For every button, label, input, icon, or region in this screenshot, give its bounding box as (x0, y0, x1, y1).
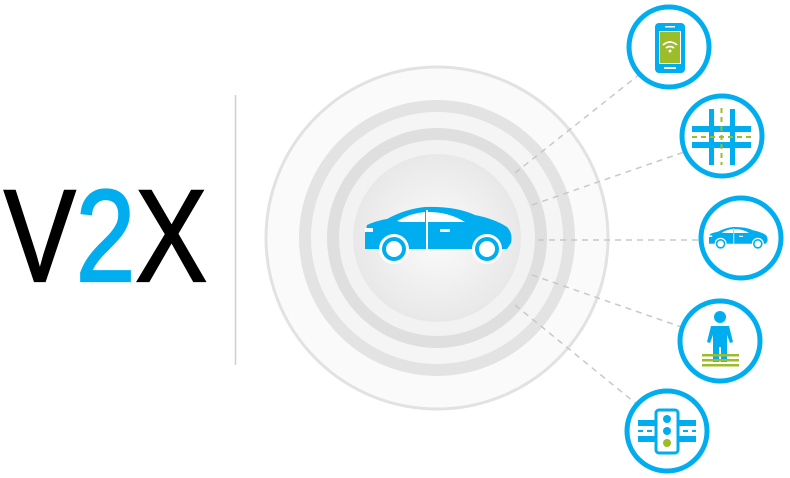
icon: smartphone (629, 7, 709, 87)
icon: traffic light (627, 391, 707, 471)
icon: intersection roads (682, 96, 762, 176)
title: V2X: V2X (4, 164, 207, 309)
divider line (234, 95, 236, 365)
icon: car (701, 198, 781, 278)
signal rings (266, 67, 608, 409)
icon: central car (365, 207, 512, 264)
icon: pedestrian (680, 301, 760, 381)
dashed connection lines (515, 62, 700, 415)
